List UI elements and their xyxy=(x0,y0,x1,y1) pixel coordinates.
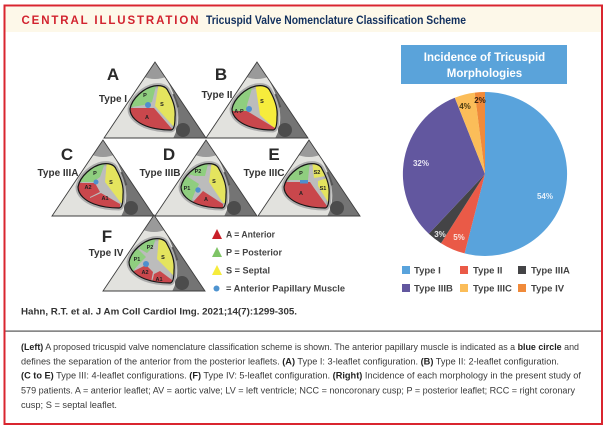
diagram F: Type IV: P1 xyxy=(134,257,140,263)
diagram F: Type IV: A1 xyxy=(155,277,163,283)
diagram F: Type IV: S xyxy=(161,255,165,261)
diagram E: Type IIIC: S2 xyxy=(314,170,320,176)
diagram C: Type IIIA: Type IIIA xyxy=(38,168,78,179)
diagram E: Type IIIC: E xyxy=(268,145,280,164)
chart title panel: Incidence of Tricuspid xyxy=(424,52,545,64)
diagram E: Type IIIC: S1 xyxy=(320,186,326,192)
diagram A: Type I: Type I xyxy=(99,94,127,105)
pie legend: Type IIIC xyxy=(473,284,512,294)
pie legend xyxy=(402,266,570,294)
diagram C: Type IIIA: A2 xyxy=(84,185,92,191)
legend: posterior: P = Posterior xyxy=(226,248,282,258)
diagram B: Type II: Type II xyxy=(202,90,233,101)
diagram E: Type IIIC xyxy=(244,140,362,218)
diagram E: Type IIIC: Type IIIC xyxy=(244,168,284,179)
diagram A: Type I: A xyxy=(107,65,119,84)
pie chart: 2% xyxy=(474,96,486,105)
diagram C: Type IIIA: S xyxy=(109,180,113,186)
caption text: (C to E) Type III: 4-leaflet configurations. (F) Type IV: 5-leaflet configuration. (Right) Incidence of each morphology in the present study of xyxy=(21,370,582,380)
pie legend: Type IIIB xyxy=(414,284,453,294)
caption text: (Left) A proposed tricuspid valve nomenclature classification scheme is shown. The anterior papillary muscle is indicated as a blue circle and xyxy=(21,342,579,352)
diagram C: Type IIIA: C xyxy=(61,145,73,164)
diagram F: Type IV: P2 xyxy=(147,245,153,251)
diagram E: Type IIIC: P xyxy=(299,171,303,177)
pie chart xyxy=(403,92,567,256)
diagram D: Type IIIB: S xyxy=(212,179,216,185)
diagram B: Type II xyxy=(202,62,310,140)
diagram E: Type IIIC: A xyxy=(299,191,303,197)
legend: papillary muscle: = Anterior Papillary Muscle xyxy=(226,284,345,294)
diagram F: Type IV: A2 xyxy=(141,270,149,276)
caption text: cusp; S = septal leaflet. xyxy=(21,400,117,410)
diagram D: Type IIIB: P2 xyxy=(195,169,201,175)
diagram C: Type IIIA: A1 xyxy=(101,196,109,202)
pie legend: Type IIIA xyxy=(531,266,570,276)
diagram D: Type IIIB: P1 xyxy=(184,186,190,192)
divider xyxy=(5,330,602,332)
diagram B: Type II: S xyxy=(260,99,264,105)
diagram C: Type IIIA xyxy=(38,140,156,218)
citation: Hahn, R.T. et al. J Am Coll Cardiol Img. 2021;14(7):1299-305. xyxy=(21,306,297,318)
diagram B: Type II: B xyxy=(215,65,227,84)
pie chart: 3% xyxy=(434,230,446,239)
legend: leaflets xyxy=(212,229,345,294)
diagram F: Type IV: Type IV xyxy=(89,248,124,259)
pie chart: 32% xyxy=(413,159,429,168)
pie legend: Type II xyxy=(473,266,502,276)
caption text: 579 patients. A = anterior leaflet; AV = aortic valve; LV = left ventricle; NCC = noncoronary cusp; P = posterior leaflet; RCC = right coronary xyxy=(21,386,576,396)
title: Tricuspid Valve Nomenclature Classification Scheme xyxy=(206,15,466,27)
chart title panel: Morphologies xyxy=(447,68,522,80)
pie legend: Type IV xyxy=(531,284,565,294)
caption text xyxy=(21,342,582,410)
legend: anterior: A = Anterior xyxy=(226,230,275,240)
pie legend: Type I xyxy=(414,266,441,276)
diagram D: Type IIIB xyxy=(140,140,259,218)
diagram A: Type I: P xyxy=(143,93,147,99)
pie chart: 5% xyxy=(453,233,465,242)
diagram A: Type I: A xyxy=(145,115,149,121)
chart title panel xyxy=(401,45,567,84)
diagram C: Type IIIA: P xyxy=(93,171,97,177)
header band xyxy=(5,7,601,32)
diagram A: Type I xyxy=(99,62,208,140)
legend: septal: S = Septal xyxy=(226,266,270,276)
diagram F: Type IV: F xyxy=(102,227,112,246)
heading: central illustration: CENTRAL ILLUSTRATION xyxy=(22,15,198,27)
diagram B: Type II: A-P xyxy=(234,109,244,115)
diagram F: Type IV xyxy=(89,215,207,293)
diagram A: Type I: S xyxy=(160,102,164,108)
caption text: defines the separation of the anterior from the posterior leaflets. (A) Type I: 3-leaflet configuration. (B) Type II: 2-leaflet configuration. xyxy=(21,356,559,366)
pie chart: 54% xyxy=(537,192,553,201)
diagram D: Type IIIB: Type IIIB xyxy=(140,168,180,179)
diagram D: Type IIIB: D xyxy=(163,145,175,164)
diagram D: Type IIIB: A xyxy=(204,197,208,203)
pie chart: 4% xyxy=(459,102,471,111)
